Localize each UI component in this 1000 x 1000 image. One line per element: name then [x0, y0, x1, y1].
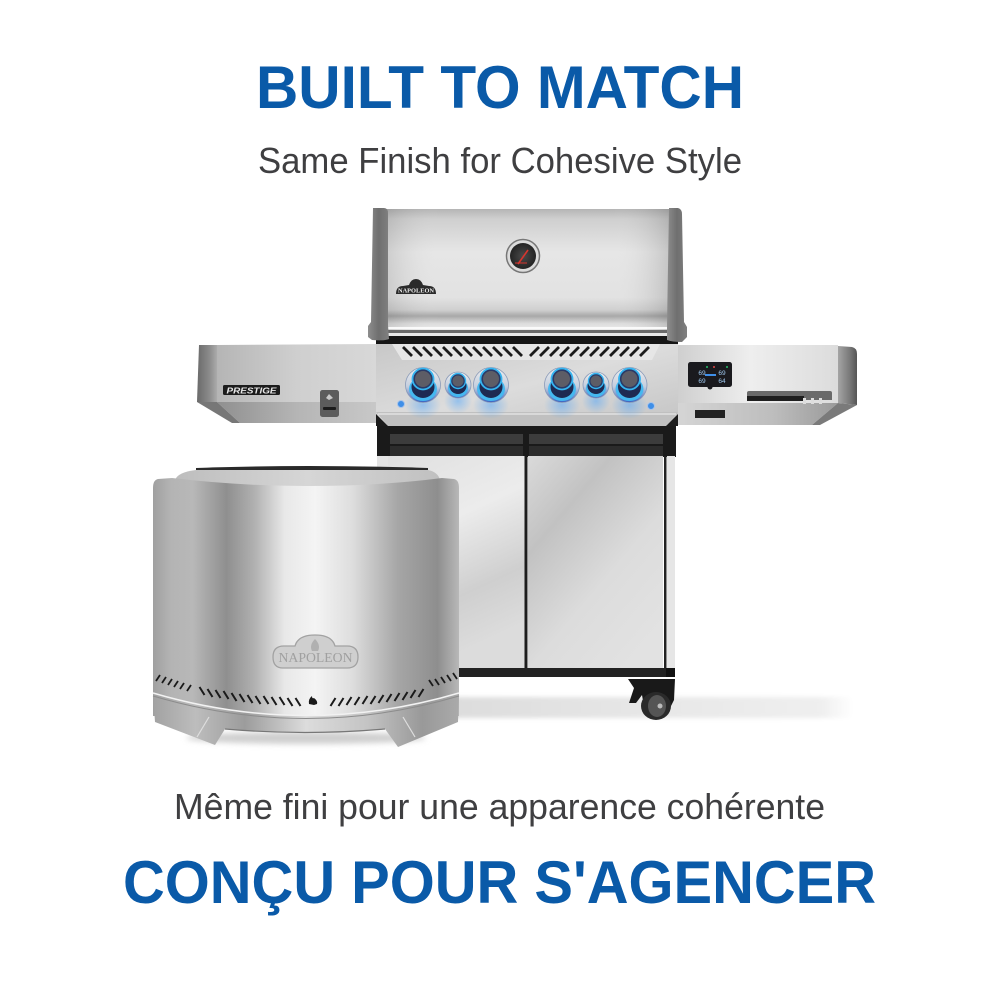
digital thermometer display: [688, 362, 732, 390]
floor shadow: [455, 697, 853, 718]
fire pit body: [153, 478, 459, 716]
vent plate: [392, 344, 660, 360]
left hood end cap: [368, 208, 389, 340]
title: BUILT TO MATCH: [256, 54, 744, 121]
burner knob: [612, 368, 648, 419]
left side shelf: [197, 344, 377, 423]
gas grill: [197, 208, 857, 720]
digital thermometer display: 69: [698, 378, 706, 385]
right side shelf: [678, 345, 857, 425]
grill hood: [368, 208, 687, 344]
fire pit base: [153, 693, 459, 747]
control panel: [376, 344, 678, 426]
vent slots: [403, 347, 649, 356]
digital thermometer display: 64: [718, 378, 726, 385]
burner knob: [544, 368, 580, 419]
french subtitle: Même fini pour une apparence cohérente: [174, 786, 825, 827]
digital thermometer display: 69: [698, 370, 706, 377]
fire pit ground shadow: [186, 732, 426, 744]
right indicator light: [648, 402, 654, 410]
subtitle: Same Finish for Cohesive Style: [258, 140, 742, 181]
burner knob: [444, 372, 472, 414]
thermometer gauge: [506, 240, 540, 272]
prestige badge: PRESTIGE: [226, 386, 277, 396]
burner knob: [582, 372, 610, 414]
flame mark: [309, 696, 317, 705]
utensil rail: [747, 391, 832, 404]
left indicator light: [398, 400, 404, 408]
digital thermometer display: 69: [718, 370, 726, 377]
napoleon badge: NAPOLEON: [398, 288, 434, 294]
burner knob: [473, 368, 509, 419]
embossed napoleon logo: NAPOLEON: [278, 651, 352, 666]
napoleon badge: [396, 279, 436, 294]
side latch: [320, 390, 339, 417]
right hood end cap: [667, 208, 687, 342]
grill cart: [377, 425, 676, 677]
burner knob: [405, 368, 441, 419]
charging port: [695, 410, 725, 418]
caster wheel: [628, 679, 675, 720]
fire pit: [153, 466, 459, 747]
pit ventilation slots: [156, 673, 457, 706]
french title: CONÇU POUR S'AGENCER: [123, 849, 876, 916]
embossed napoleon logo: [273, 635, 358, 668]
fire pit rim: [175, 466, 440, 488]
